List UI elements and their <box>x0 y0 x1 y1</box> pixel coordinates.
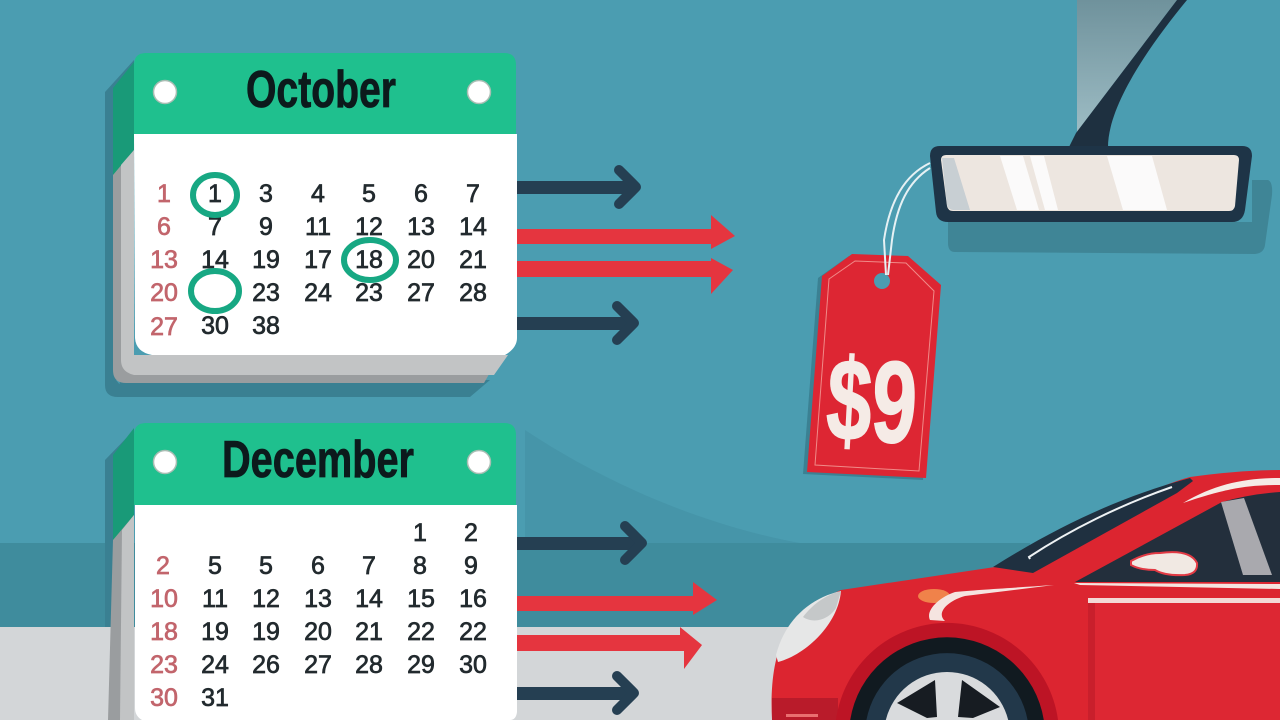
rearview mirror <box>930 0 1272 254</box>
date grid: 6 <box>414 180 428 208</box>
headlight glare <box>803 591 841 620</box>
arrow: October dark top <box>517 170 636 204</box>
door left shading <box>1088 600 1095 720</box>
date grid: 23 <box>355 279 383 307</box>
mirror stalk reflection <box>1077 0 1177 132</box>
date grid: 1 <box>413 519 427 547</box>
highlight circle on 1 <box>193 175 237 215</box>
arrow: October red lower <box>517 258 733 294</box>
date grid: 6 <box>311 552 325 580</box>
date grid: 5 <box>259 552 273 580</box>
car body <box>772 470 1280 720</box>
date grid: 14 <box>355 585 383 613</box>
date grid <box>150 180 487 341</box>
window sill line <box>1074 583 1280 589</box>
calendar header <box>134 423 516 505</box>
date grid: 9 <box>464 552 478 580</box>
tag shadow <box>803 256 938 480</box>
date grid: 22 <box>459 618 487 646</box>
date grid: 14 <box>201 246 229 274</box>
date grid: 19 <box>252 618 280 646</box>
mirror stalk <box>1069 0 1187 147</box>
date grid: 20 <box>150 279 178 307</box>
wheel arch <box>836 623 1058 720</box>
mirror glass <box>941 155 1239 211</box>
arrow: December red lower <box>517 627 702 669</box>
date grid: 5 <box>362 180 376 208</box>
month title: October <box>246 61 396 119</box>
calendar page stack <box>105 60 508 397</box>
date grid: 30 <box>459 651 487 679</box>
date grid: 28 <box>355 651 383 679</box>
date grid: 19 <box>201 618 229 646</box>
arrow: December red upper <box>517 582 717 615</box>
arrow: October dark bottom <box>517 306 634 340</box>
date grid: 38 <box>252 312 280 340</box>
mirror shadow <box>948 180 1272 254</box>
date grid: 9 <box>259 213 273 241</box>
date grid: 11 <box>305 213 331 241</box>
mirror left shade <box>942 158 970 210</box>
date grid: 20 <box>407 246 435 274</box>
hood crease highlight <box>929 585 1054 621</box>
panel: October calendar <box>105 53 517 397</box>
date grid <box>150 519 487 712</box>
date grid: 29 <box>407 651 435 679</box>
arrow: October red upper <box>517 215 735 249</box>
date grid: 17 <box>304 246 332 274</box>
date grid: 5 <box>208 552 222 580</box>
calendar paper <box>134 134 517 355</box>
calendar page stack <box>105 428 134 720</box>
indicator <box>918 589 950 603</box>
price tag <box>803 163 941 480</box>
red car <box>772 470 1280 720</box>
side window <box>1075 492 1280 582</box>
date grid: 21 <box>459 246 487 274</box>
rim windows <box>897 680 1000 718</box>
date grid: 7 <box>466 180 480 208</box>
rim <box>886 672 1008 720</box>
date grid: 22 <box>407 618 435 646</box>
date grid: 27 <box>407 279 435 307</box>
date grid: 12 <box>252 585 280 613</box>
binder hole right <box>468 450 490 474</box>
date grid: 6 <box>157 213 171 241</box>
mirror frame <box>930 146 1252 222</box>
tag shape <box>807 254 941 478</box>
date grid: 31 <box>201 684 229 712</box>
date grid: 28 <box>459 279 487 307</box>
date grid: 3 <box>259 180 273 208</box>
date grid: 15 <box>407 585 435 613</box>
arrow: December dark top <box>517 526 642 560</box>
date grid: 1 <box>208 180 222 208</box>
tag hole <box>874 273 890 289</box>
date grid: 18 <box>150 618 178 646</box>
date grid: 4 <box>311 180 325 208</box>
calendar paper <box>135 505 517 720</box>
door top line <box>1088 598 1280 603</box>
date grid: 2 <box>464 519 478 547</box>
date grid: 30 <box>201 312 229 340</box>
date grid: 16 <box>459 585 487 613</box>
date grid: 20 <box>304 618 332 646</box>
date grid: 24 <box>201 651 229 679</box>
date grid: 12 <box>355 213 383 241</box>
date grid: 18 <box>355 246 383 274</box>
price: $9 <box>824 334 920 468</box>
windshield <box>993 478 1193 573</box>
roof highlight <box>1183 478 1280 503</box>
date grid: 26 <box>252 651 280 679</box>
tag inner border <box>815 261 934 471</box>
date grid: 24 <box>304 279 332 307</box>
date grid: 13 <box>150 246 178 274</box>
month title: December <box>222 431 414 489</box>
tyre inner <box>866 653 1028 720</box>
date grid: 10 <box>150 585 178 613</box>
date grid: 23 <box>150 651 178 679</box>
arrow: December dark bottom <box>517 676 634 710</box>
binder hole left <box>154 80 176 104</box>
date grid: 7 <box>208 213 222 241</box>
binder hole right <box>468 80 490 104</box>
date grid: 11 <box>202 585 228 613</box>
date grid: 27 <box>150 313 178 341</box>
date grid: 14 <box>459 213 487 241</box>
calendar header <box>134 53 516 134</box>
bumper shade <box>772 698 838 720</box>
tag strings <box>884 163 930 275</box>
date grid: 13 <box>407 213 435 241</box>
date grid: 23 <box>252 279 280 307</box>
wheel <box>836 623 1058 720</box>
wiper highlight <box>1029 487 1172 559</box>
date grid: 30 <box>150 684 178 712</box>
window pillar <box>1221 498 1272 575</box>
date grid: 2 <box>156 552 170 580</box>
highlight circle on 18 <box>344 240 396 280</box>
date grid: 13 <box>304 585 332 613</box>
date grid: 8 <box>413 552 427 580</box>
binder hole left <box>154 450 176 474</box>
date grid: 19 <box>252 246 280 274</box>
door panel <box>1088 598 1280 720</box>
panel: December calendar <box>105 423 517 720</box>
headlight <box>776 591 841 662</box>
tyre outer <box>850 637 1044 720</box>
date grid: 21 <box>355 618 383 646</box>
date grid: 1 <box>157 180 171 208</box>
date grid: 27 <box>304 651 332 679</box>
mirror glare <box>1000 156 1167 210</box>
date grid: 7 <box>362 552 376 580</box>
door mirror <box>1131 552 1197 575</box>
empty highlight circle <box>191 271 239 311</box>
bumper line <box>786 714 818 717</box>
